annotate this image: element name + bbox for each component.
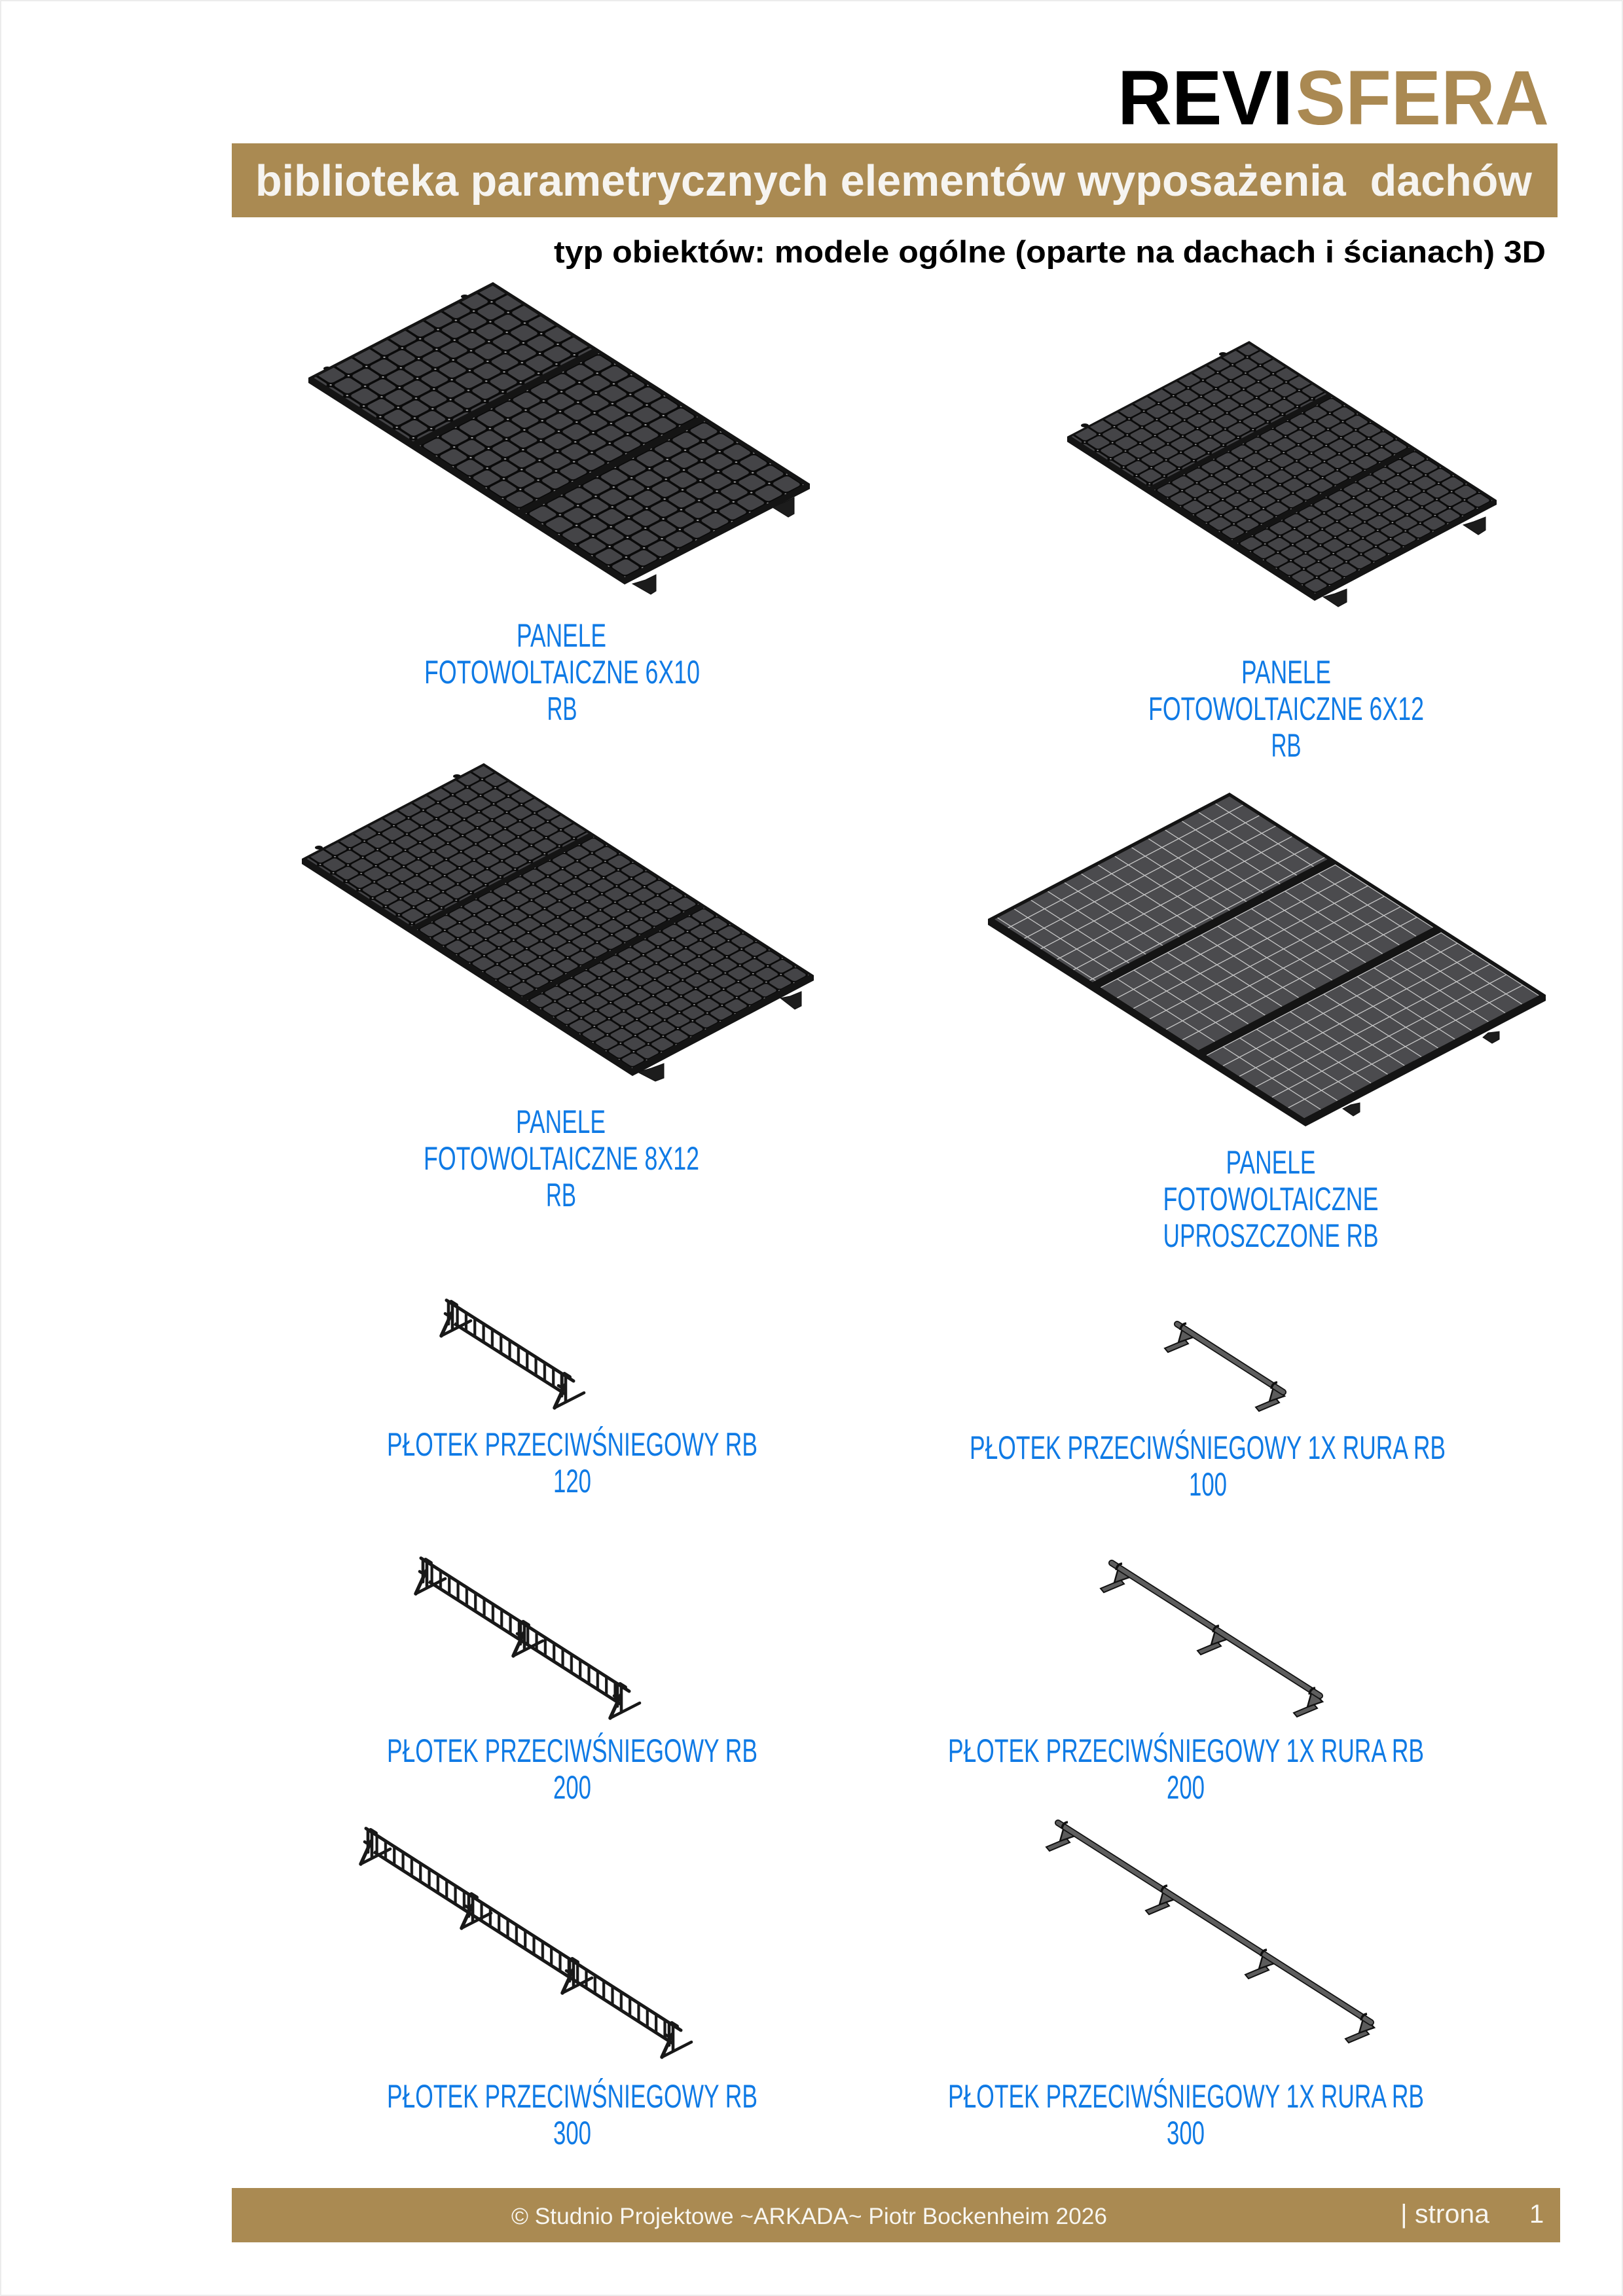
label: panels 6x12: RB [1271,727,1302,764]
label: snow fence 120 [387,1426,757,1499]
drawing: snow fence single pipe 200 [1101,1563,1322,1717]
panel: solar panels 8x12 drawing [302,763,814,1081]
label: snow fence single pipe 100: 100 [1189,1466,1227,1503]
subtitle: object type: typ obiektów: modele ogólne (oparte na dachach i ścianach) 3D [554,234,1546,269]
label: simplified panels [1163,1144,1379,1254]
label: snow fence single pipe 100 [970,1429,1446,1503]
label: panels 6x10: FOTOWOLTAICZNE 6X10 [424,654,700,691]
label: snow fence single pipe 300: 300 [1167,2115,1205,2151]
footer bar [232,2188,1560,2242]
drawing: snow fence 300 [361,1829,691,2057]
footer bar: 1 [1529,2200,1544,2229]
logo: REVISFERA [1118,55,1549,141]
label: panels 6x10: RB [547,691,577,727]
label: panels 8x12: PANELE [516,1103,606,1140]
panel: simplified solar panels drawing [988,793,1546,1126]
footer bar: © Studnio Projektowe ~ARKADA~ Piotr Bockenheim 2026 [511,2204,1107,2229]
label: snow fence single pipe 200: PŁOTEK PRZECIWŚNIEGOWY 1X RURA RB [948,1732,1424,1769]
label: snow fence 300: PŁOTEK PRZECIWŚNIEGOWY RB [387,2077,757,2115]
label: snow fence single pipe 300 [948,2077,1424,2151]
label: panels 8x12 [424,1103,699,1213]
label: panels 6x12: FOTOWOLTAICZNE 6X12 [1148,691,1424,727]
label: panels 6x10 [424,617,700,727]
panel: solar panels 6x12 drawing [1067,341,1497,607]
footer bar: | strona [1400,2200,1490,2229]
label: snow fence 200: 200 [553,1769,591,1806]
label: snow fence 120: 120 [553,1463,591,1499]
label: panels 6x12 [1148,654,1424,764]
title banner: biblioteka parametrycznych elementów wyposażenia dachów [255,156,1533,206]
label: snow fence 120: PŁOTEK PRZECIWŚNIEGOWY RB [387,1426,757,1463]
label: snow fence 300 [387,2077,757,2151]
label: panels 8x12: FOTOWOLTAICZNE 8X12 [424,1140,699,1177]
drawing: snow fence single pipe 300 [1046,1822,1374,2043]
drawing: snow fence 200 [416,1558,640,1718]
label: snow fence single pipe 300: PŁOTEK PRZECIWŚNIEGOWY 1X RURA RB [948,2077,1424,2115]
panel: solar panels 6x10 drawing [308,282,810,594]
label: snow fence 300: 300 [553,2115,591,2151]
label: snow fence single pipe 200 [948,1732,1424,1806]
label: panels 6x12: PANELE [1241,654,1331,691]
label: snow fence 200: PŁOTEK PRZECIWŚNIEGOWY RB [387,1732,757,1769]
label: panels 8x12: RB [546,1177,576,1213]
label: snow fence single pipe 200: 200 [1167,1769,1205,1806]
label: snow fence single pipe 100: PŁOTEK PRZECIWŚNIEGOWY 1X RURA RB [970,1429,1446,1466]
drawing: snow fence single pipe 100 [1165,1323,1285,1411]
label: snow fence 200 [387,1732,757,1806]
title banner [232,143,1558,217]
drawing: snow fence 120 [441,1300,584,1408]
logo: REVISFERA: REVI [1118,55,1293,141]
label: simplified panels: UPROSZCZONE RB [1163,1217,1379,1254]
label: simplified panels: FOTOWOLTAICZNE [1163,1181,1379,1217]
logo: REVISFERA: SFERA [1296,55,1549,141]
label: panels 6x10: PANELE [517,617,606,654]
label: simplified panels: PANELE [1226,1144,1316,1181]
